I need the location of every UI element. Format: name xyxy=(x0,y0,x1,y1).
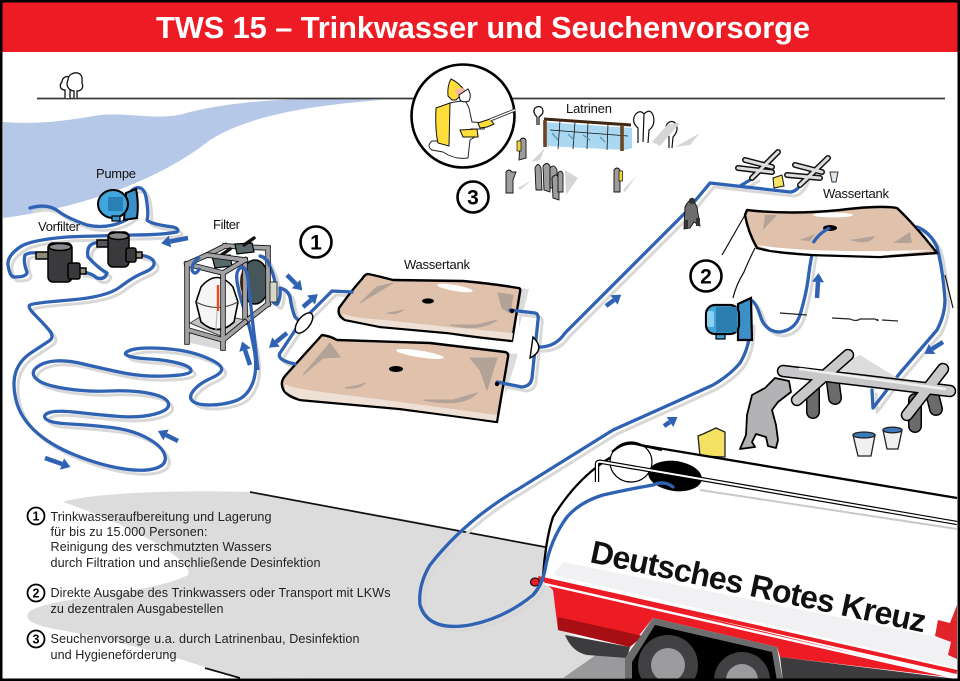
label: Pumpe: Pumpe xyxy=(96,166,136,181)
rail xyxy=(597,462,957,523)
right water tank xyxy=(722,207,953,308)
legend item 1: für bis zu 15.000 Personen: xyxy=(50,525,208,539)
outline xyxy=(543,445,957,577)
hose shadows xyxy=(12,181,949,630)
tanker truck xyxy=(530,442,957,681)
icon: filter unit xyxy=(187,238,277,370)
flow arrows xyxy=(45,238,943,464)
water tank upper xyxy=(339,274,520,341)
wheels xyxy=(638,635,770,681)
number badge 1 xyxy=(300,226,332,258)
yellow canister xyxy=(698,428,725,457)
road and shadow area xyxy=(27,491,700,681)
small bucket xyxy=(830,172,838,182)
underside xyxy=(565,635,630,658)
title banner xyxy=(0,0,960,52)
wheel arch xyxy=(625,618,783,681)
bump circle xyxy=(610,442,652,482)
legend item 3 xyxy=(28,630,360,662)
legend item 2: zu dezentralen Ausgabestellen xyxy=(50,602,224,616)
red stripe xyxy=(538,578,957,672)
legend xyxy=(28,508,390,662)
label: Wassertank: Wassertank xyxy=(404,257,470,272)
icon: sprayer in circle xyxy=(412,64,515,168)
tank cast shadows xyxy=(505,288,529,396)
tank body xyxy=(543,445,957,678)
buckets xyxy=(853,427,902,456)
number badge 2: 2 xyxy=(700,266,712,288)
label: Wassertank right: Wassertank xyxy=(823,186,890,201)
person at tap xyxy=(740,378,791,449)
red cross xyxy=(935,605,957,659)
icons: trees near latrine xyxy=(534,106,677,148)
road edge lines xyxy=(205,492,545,678)
rear chassis xyxy=(780,657,957,681)
rail shadow xyxy=(700,490,957,529)
title banner: TWS 15 – Trinkwasser und Seuchenvorsorge xyxy=(156,10,810,45)
small person with cans xyxy=(684,198,700,228)
number badge 3 xyxy=(458,182,488,212)
tank group 1 xyxy=(282,274,529,422)
wheel well xyxy=(632,625,777,681)
small canister xyxy=(773,175,784,188)
legend item 3: Seuchenvorsorge u.a. durch Latrinenbau, Desinfektion xyxy=(50,632,360,646)
shadows of people and trees xyxy=(518,123,700,195)
grey band xyxy=(553,562,957,668)
icon: prefilter right xyxy=(97,232,142,267)
red lower body xyxy=(540,578,957,678)
truck lettering: Deutsches Rotes Kreuz xyxy=(588,534,930,639)
legend item 3: 3 xyxy=(33,632,40,646)
small tap stands in distance xyxy=(738,152,828,185)
label: Latrinen: Latrinen xyxy=(566,101,612,116)
number badge 2 xyxy=(690,260,722,292)
hatch xyxy=(646,457,704,495)
white stripe xyxy=(545,584,957,678)
icon: latrine building xyxy=(543,119,632,151)
legend item 1: Trinkwasseraufbereitung und Lagerung xyxy=(50,510,272,524)
dark red sill xyxy=(558,617,643,647)
hose into hatch xyxy=(533,483,673,595)
label: Vorfilter: Vorfilter xyxy=(38,219,81,234)
number badge 1: 1 xyxy=(310,232,322,254)
legend item 2 xyxy=(28,584,390,616)
red end cap xyxy=(530,578,540,586)
legend item 2: Direkte Ausgabe des Trinkwassers oder Transport mit LKWs xyxy=(50,586,390,600)
legend item 1: 1 xyxy=(33,510,40,524)
icon: trees on horizon xyxy=(60,73,83,98)
horizon line xyxy=(37,98,945,100)
people group xyxy=(506,138,700,229)
ground marks xyxy=(780,313,898,321)
legend item 3: und Hygieneförderung xyxy=(50,648,176,662)
tap stand xyxy=(783,355,950,426)
number badge 3: 3 xyxy=(467,186,479,210)
icon: right pump xyxy=(706,298,752,340)
water tank lower xyxy=(282,335,508,422)
road darker section xyxy=(563,650,650,678)
icon: top pump xyxy=(98,189,138,221)
hose ends at upper tank xyxy=(495,309,514,386)
legend item 2: 2 xyxy=(33,586,40,600)
legend item 1: durch Filtration und anschließende Desinfektion xyxy=(50,556,320,570)
label: Filter: Filter xyxy=(213,217,241,232)
water surface xyxy=(3,99,382,218)
legend item 1: Reinigung des verschmutzten Wassers xyxy=(50,540,272,554)
valves on tank pipes xyxy=(292,310,539,358)
hose network xyxy=(8,177,945,626)
icon: prefilter left xyxy=(36,243,86,282)
labels xyxy=(38,101,890,272)
legend item 1 xyxy=(28,508,320,570)
sprayer backpacks and buckets xyxy=(517,141,622,181)
